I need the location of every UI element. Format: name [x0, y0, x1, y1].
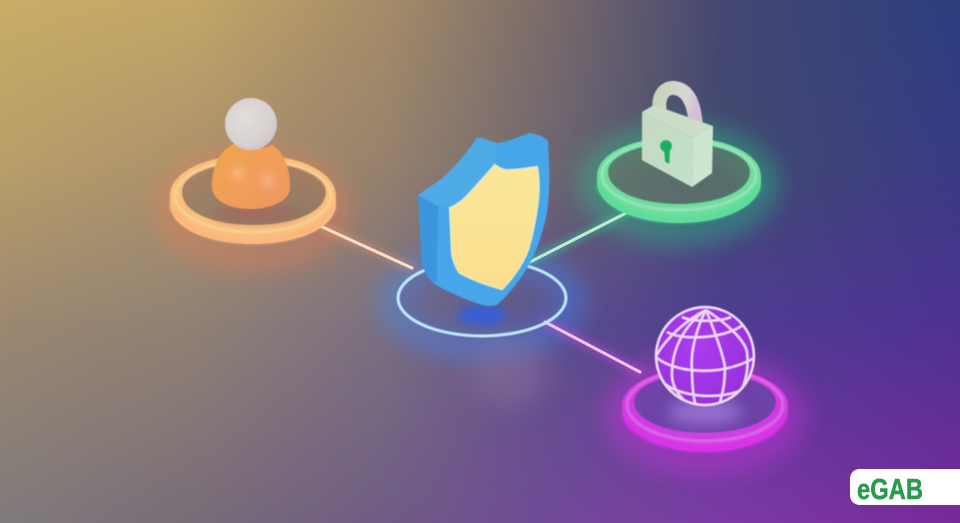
shadow: shield	[458, 305, 506, 325]
shield body	[418, 133, 549, 306]
figure head	[225, 98, 277, 150]
ring: orange	[170, 155, 336, 244]
highlights on body	[232, 167, 275, 188]
shield top bevel	[418, 138, 497, 208]
keyhole	[660, 140, 672, 164]
glow: coloured halos around the rings	[167, 138, 791, 460]
figure body	[212, 143, 290, 209]
line: lock to shield	[530, 212, 628, 262]
globe outline	[656, 307, 754, 405]
shield yellow face rim	[450, 165, 539, 289]
lock top face	[642, 105, 713, 138]
lock right face	[692, 126, 713, 187]
shield left edge	[418, 195, 438, 283]
node: lock on green ring	[597, 88, 761, 223]
glow under globe	[667, 399, 743, 425]
line: shield to globe	[545, 322, 640, 372]
node: shield on blue ring	[398, 133, 566, 336]
line: person to shield	[318, 225, 412, 268]
ring: purple	[622, 367, 788, 452]
node: person on orange ring	[170, 98, 336, 244]
lock front face	[642, 112, 693, 187]
ring: blue	[398, 260, 566, 336]
logo badge: eGAB	[850, 469, 960, 506]
globe wire grid	[656, 310, 754, 407]
globe sphere	[656, 307, 754, 405]
shadow: person	[212, 205, 300, 223]
connector lines	[318, 212, 640, 372]
shield yellow face	[450, 165, 539, 289]
lock shackle	[659, 88, 696, 134]
node: globe on purple ring	[622, 307, 788, 452]
ring: green	[597, 137, 761, 223]
logo text: eGAB	[857, 474, 923, 506]
